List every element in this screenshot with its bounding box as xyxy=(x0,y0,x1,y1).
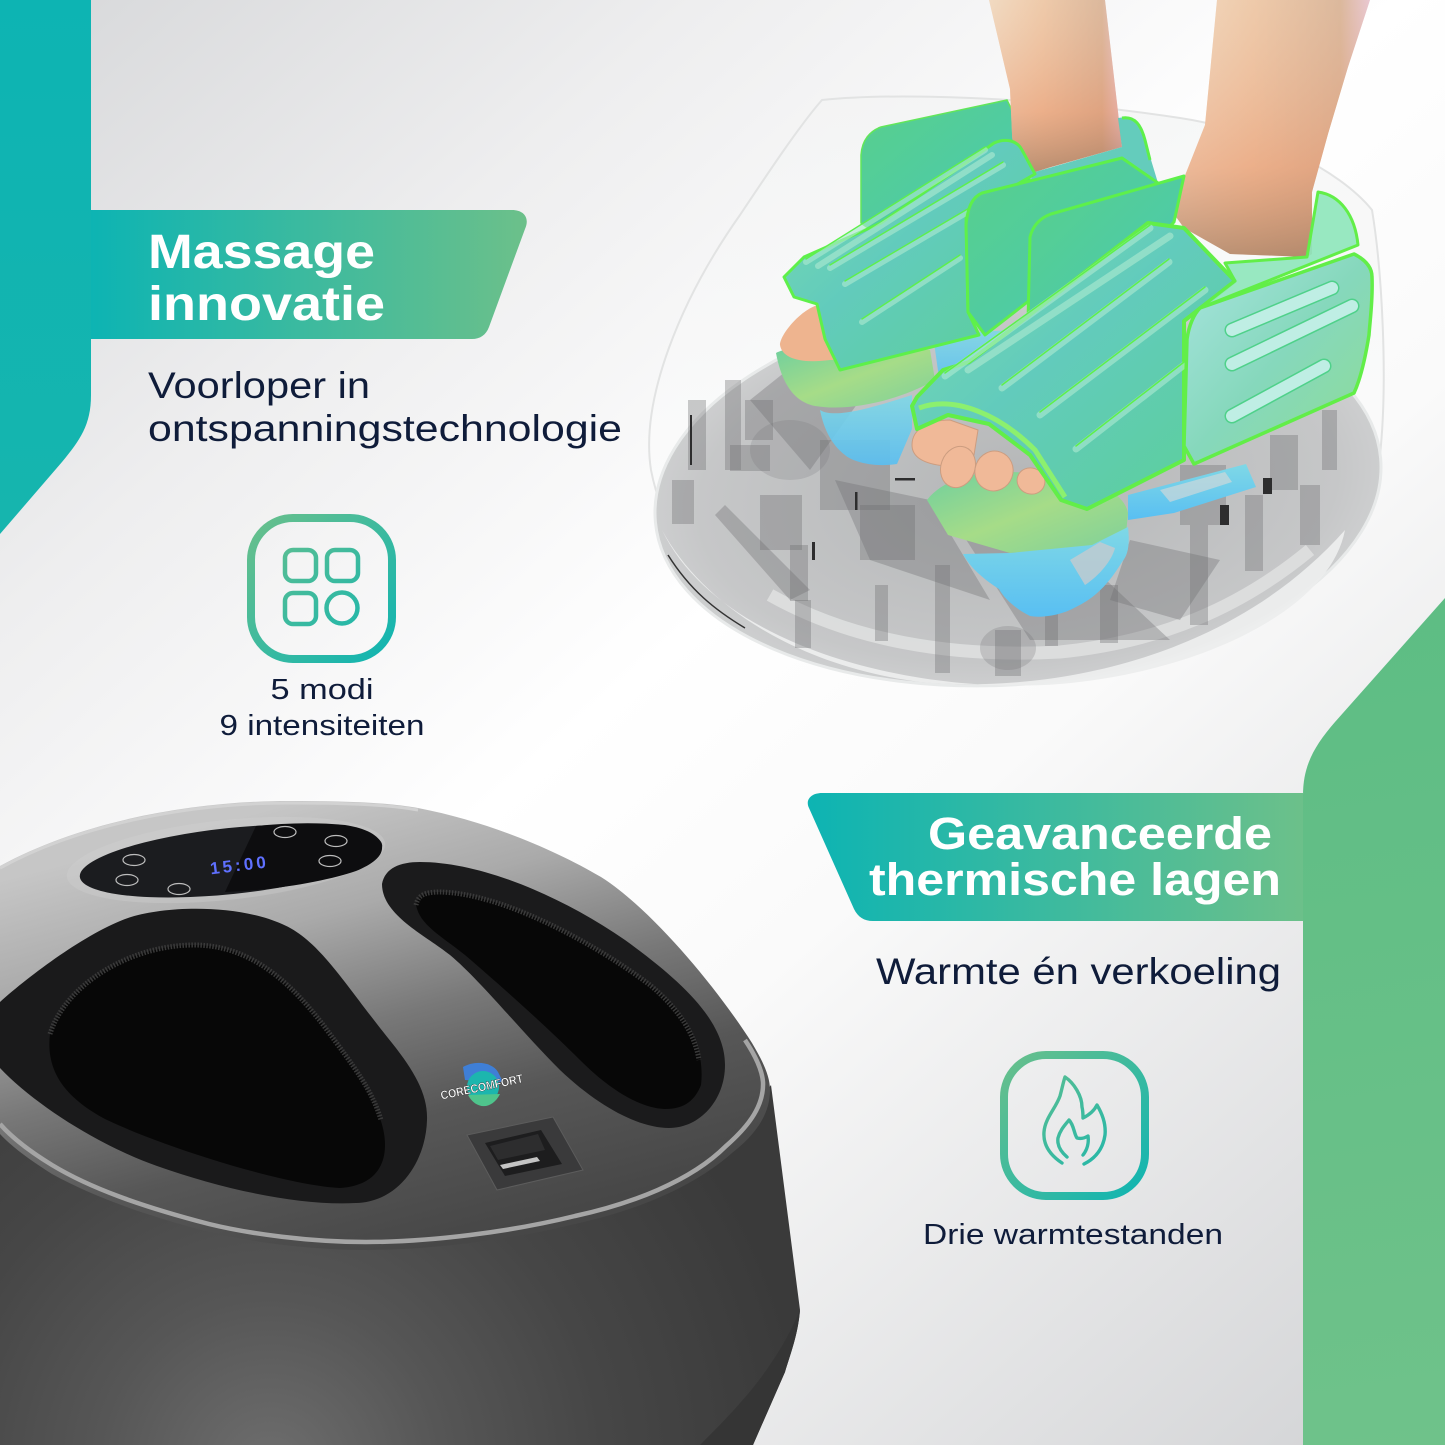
subtitle: Voorloper in ontspanningstechnologie xyxy=(148,365,622,449)
back foot strap xyxy=(784,140,1035,370)
top edge highlight xyxy=(0,803,418,868)
front foot rollers xyxy=(927,464,1256,617)
product: foot massager exterior xyxy=(0,801,800,1445)
machine top plate xyxy=(0,801,770,1250)
banner: Geavanceerde thermische lagen: thermische lagen xyxy=(869,854,1281,905)
caption: 5 modi 9 intensiteiten xyxy=(220,674,424,742)
usb port xyxy=(467,1117,583,1190)
machine base lip xyxy=(700,1310,800,1445)
back foot second panel xyxy=(966,158,1158,335)
left teal accent shape xyxy=(0,0,91,534)
banner: Geavanceerde thermische lagen xyxy=(808,793,1303,921)
banner: Geavanceerde thermische lagen: Geavanceerde xyxy=(928,808,1272,859)
rollers back foot xyxy=(776,330,1010,465)
base disc xyxy=(638,265,1398,715)
front foot heel panel xyxy=(1028,176,1184,330)
right green accent shape xyxy=(1303,598,1445,1445)
subtitle: Voorloper in ontspanningstechnologie: Voorloper in xyxy=(148,365,370,406)
display panel xyxy=(76,812,386,910)
display time: 15:00 xyxy=(209,853,267,878)
rim highlight xyxy=(0,1040,763,1242)
back foot heel panel xyxy=(861,100,1030,240)
banner: Massage innovatie xyxy=(91,210,527,339)
internal parts xyxy=(672,360,1337,676)
subtitle: Voorloper in ontspanningstechnologie: ontspanningstechnologie xyxy=(148,408,622,449)
dark internal marks xyxy=(690,415,1272,560)
front foot toes xyxy=(912,420,1049,498)
caption: Drie warmtestanden: Drie warmtestanden xyxy=(923,1219,1223,1251)
right leg xyxy=(1174,0,1370,257)
subtitle: Warmte en verkoeling: Warmte én verkoeling xyxy=(876,951,1281,992)
left leg shading xyxy=(989,0,1122,172)
back foot ankle cuff xyxy=(1000,117,1158,240)
back foot toe xyxy=(780,305,850,361)
caption: 5 modi 9 intensiteiten: 5 modi xyxy=(270,674,374,706)
left leg xyxy=(989,0,1122,172)
caption: 5 modi 9 intensiteiten: 9 intensiteiten xyxy=(220,710,424,742)
front foot ankle cuff xyxy=(1200,192,1358,308)
front foot side strap xyxy=(1184,254,1372,464)
right foot opening xyxy=(382,862,725,1128)
back foot cuff edge xyxy=(1122,118,1150,160)
banner: Massage innovatie: Massage xyxy=(148,226,375,279)
transparent shell xyxy=(649,97,1384,682)
touch buttons xyxy=(116,826,347,894)
logo: CoreComfort: CORECOMFORT xyxy=(439,1071,525,1103)
icon: modes grid xyxy=(251,518,392,659)
left foot opening xyxy=(0,909,427,1203)
icon: flame xyxy=(1004,1055,1145,1196)
front foot strap xyxy=(912,223,1235,509)
product: transparent massager with feet xyxy=(638,0,1398,715)
machine body xyxy=(0,1085,800,1445)
right leg shading xyxy=(1174,0,1370,257)
display recess xyxy=(63,803,389,917)
banner: Massage innovatie: innovatie xyxy=(148,278,385,331)
